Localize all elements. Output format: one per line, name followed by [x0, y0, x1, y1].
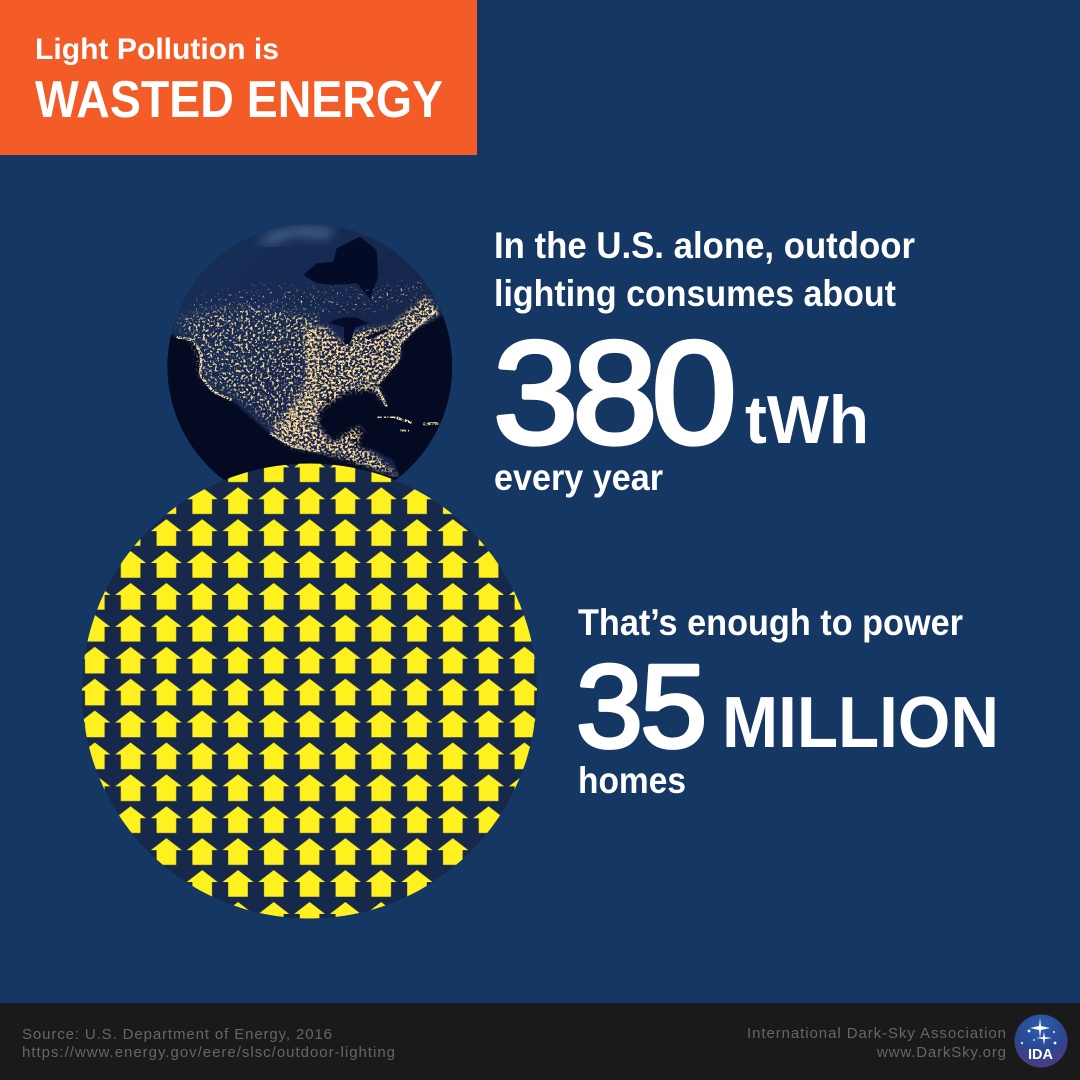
- globe: North America at night: [167, 224, 452, 480]
- statement: homes powered: [576, 602, 999, 801]
- statement: outdoor lighting energy: [493, 225, 915, 498]
- header line: Light Pollution is: Light Pollution is: [35, 33, 279, 66]
- number: 35: 35: [576, 641, 707, 773]
- Arctic ice: [257, 225, 337, 245]
- bright coast lines: [177, 310, 437, 452]
- footer bar: [0, 1003, 1080, 1080]
- number: 380: 380: [493, 310, 737, 474]
- source text: [22, 1026, 395, 1061]
- Caribbean islands: [377, 417, 439, 431]
- organization text: International Dark-Sky Association: [747, 1025, 1006, 1042]
- city lights east: [270, 295, 440, 477]
- city lights west: [175, 303, 320, 440]
- circle of yellow houses: [82, 464, 537, 918]
- intro text: That’s enough to power: [578, 602, 963, 643]
- Hudson Bay: [303, 237, 378, 298]
- header banner: [0, 0, 477, 155]
- header title: WASTED ENERGY: WASTED ENERGY: [35, 71, 443, 129]
- statement: outdoor lighting energy: lighting consumes about: [494, 273, 896, 314]
- IDA logo: [1014, 1014, 1068, 1068]
- sparse lights across Canada: [190, 280, 427, 313]
- unit: MILLION: MILLION: [722, 683, 999, 763]
- source text: https://www.energy.gov/eere/slsc/outdoor-lighting: [22, 1044, 395, 1061]
- IDA logo: IDA: [1028, 1047, 1054, 1063]
- caption: every year: every year: [494, 457, 663, 498]
- intro text: In the U.S. alone, outdoor: [494, 225, 915, 266]
- Great Lakes: [328, 317, 388, 344]
- unit: tWh: tWh: [745, 382, 869, 458]
- organization text: [747, 1025, 1006, 1061]
- land mass: [163, 217, 443, 478]
- source text: Source: U.S. Department of Energy, 2016: [22, 1026, 332, 1043]
- caption: homes: homes: [578, 760, 686, 801]
- organization text: www.DarkSky.org: [876, 1044, 1006, 1061]
